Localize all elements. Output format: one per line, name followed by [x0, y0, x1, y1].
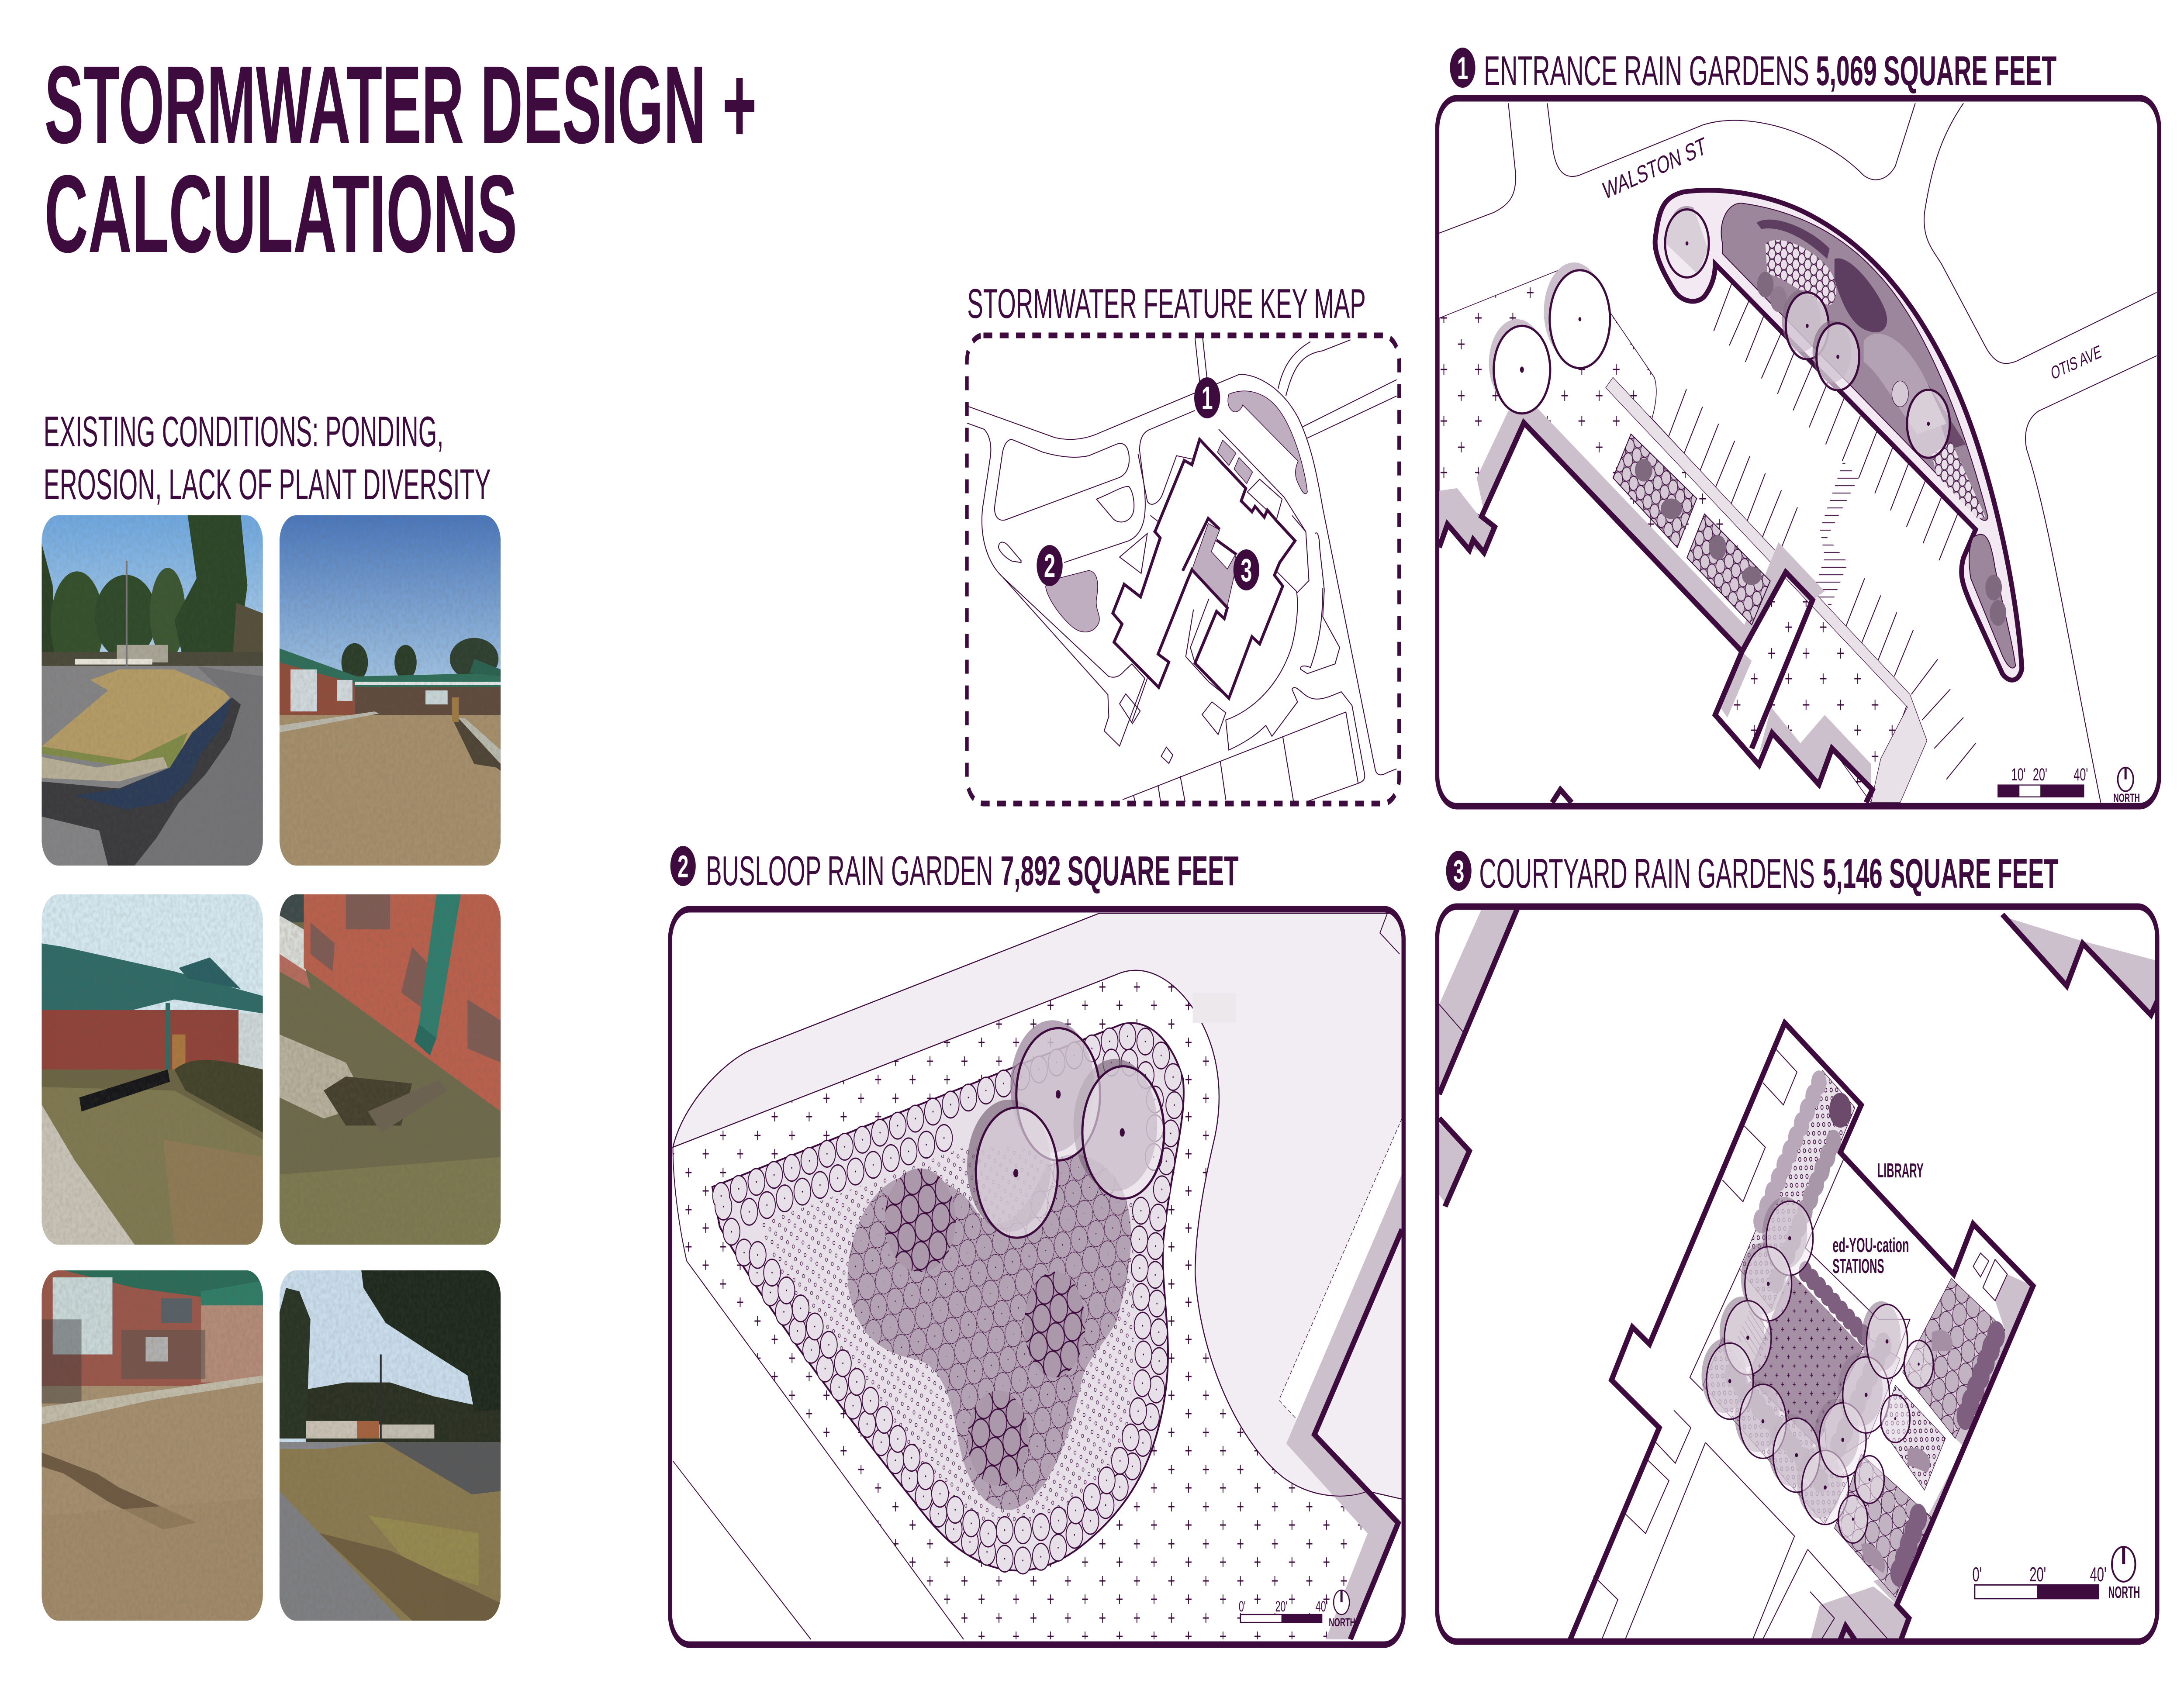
shaded edges	[1439, 909, 2158, 1642]
bed accents	[1861, 1330, 1952, 1573]
street labels and scale text: panel 1: 10'	[2011, 765, 2026, 785]
photo: brick wall downspout erosion	[280, 894, 501, 1245]
site lines	[673, 913, 1400, 1639]
pale drive area	[673, 913, 1402, 1499]
street labels and scale text: panel 1: WALSTON ST	[1601, 132, 1708, 204]
building outline	[1113, 439, 1295, 698]
title: CALCULATIONS	[45, 152, 517, 276]
walkway strip	[1606, 377, 1927, 803]
rain garden areas	[1046, 391, 1307, 632]
marker 2: 2	[1044, 548, 1055, 584]
front rain beds	[1613, 434, 1770, 625]
parking stalls	[1668, 282, 1976, 780]
heading: existing conditions	[44, 408, 491, 509]
marker 2	[1037, 545, 1063, 586]
scale text: panel 2: NORTH	[1329, 1616, 1355, 1629]
dashed frame	[967, 335, 1399, 804]
site linework	[1439, 1004, 2007, 1642]
right bed hedges	[1895, 1335, 1996, 1584]
labels and scale text: panel 3: LIBRARY	[1877, 1159, 1924, 1182]
heading: courtyard rain gardens: 3	[1453, 853, 1464, 889]
building outline	[1439, 909, 2158, 1642]
heading: existing conditions: EROSION, LACK OF PLANT DIVERSITY	[44, 461, 491, 509]
shrub clusters	[885, 1168, 1085, 1486]
labels and scale text: panel 3: 40'	[2090, 1563, 2107, 1586]
heading: courtyard rain gardens: 5,146 SQUARE FEET	[1823, 850, 2059, 897]
heading: entrance rain gardens	[1450, 48, 2056, 95]
inner row	[749, 1061, 1156, 1534]
labels and scale text: panel 3	[1832, 1159, 2140, 1601]
site linework	[967, 338, 1396, 802]
labels and scale text: panel 3: 0'	[1972, 1563, 1982, 1586]
scale bar	[1975, 1585, 2098, 1599]
title: STORMWATER DESIGN +	[45, 42, 757, 166]
building shadow band	[1439, 408, 1871, 790]
heading: entrance rain gardens: 5,069 SQUARE FEET	[1816, 48, 2056, 95]
street labels and scale text: panel 1	[1601, 132, 2140, 804]
scale bar	[1997, 784, 2084, 797]
plaza lawn	[1439, 263, 1910, 803]
scale text: panel 2: 40'	[1316, 1598, 1328, 1615]
scale bar	[1241, 1615, 1322, 1622]
building outline	[1314, 1229, 1402, 1639]
bed blobs	[1635, 459, 1762, 585]
tree trunks	[1728, 1236, 1920, 1521]
heading: busloop rain garden: 2	[677, 849, 688, 884]
scale text: panel 2: 20'	[1275, 1598, 1288, 1615]
street labels and scale text: panel 1: 20'	[2033, 765, 2047, 785]
title	[45, 42, 757, 276]
main rain garden	[1655, 190, 2022, 680]
central basin	[848, 1155, 1131, 1510]
panel: entrance rain gardens plan	[1439, 103, 2157, 803]
marker 1: 1	[1202, 380, 1213, 417]
lawn with plus symbols	[673, 970, 1398, 1639]
street labels and scale text: panel 1: NORTH	[2113, 791, 2140, 804]
north arrow	[2118, 767, 2133, 791]
panel frame: entrance	[1437, 98, 2159, 806]
heading: entrance rain gardens: ENTRANCE RAIN GARDENS	[1484, 48, 1809, 95]
heading: existing conditions: EXISTING CONDITIONS: PONDING,	[44, 408, 444, 456]
streets	[1439, 103, 2157, 803]
heading: courtyard rain gardens	[1446, 850, 2059, 897]
garden trees	[1665, 206, 1950, 458]
courtyard trees	[1707, 1201, 1933, 1543]
panel: busloop rain garden plan	[673, 913, 1402, 1639]
garden inner beds	[1721, 203, 2015, 668]
street labels and scale text: panel 1: 40'	[2073, 765, 2088, 785]
labels and scale text: panel 3: 20'	[2029, 1563, 2046, 1586]
labels and scale text: panel 3: ed-YOU-cation	[1832, 1234, 1909, 1257]
right beds	[1835, 1279, 2005, 1597]
middle shrub row	[1835, 1345, 1883, 1454]
tree canopy shadows	[967, 1020, 1157, 1232]
lawn trees	[1489, 262, 1610, 414]
marker 1	[1194, 377, 1220, 418]
panel: stormwater feature key map	[967, 335, 1399, 804]
parking edge strip	[1279, 1118, 1402, 1421]
crosswalk	[1813, 462, 1859, 607]
upper planting strip	[1739, 1070, 1855, 1309]
heading: entrance rain gardens: 1	[1457, 50, 1468, 86]
lower planting strip	[1703, 1338, 1849, 1524]
marker 3	[1234, 549, 1259, 590]
photo: road edge and parking	[280, 1270, 501, 1621]
north arrow	[1334, 1590, 1349, 1615]
marker 3: 3	[1241, 552, 1252, 589]
trees	[976, 1028, 1164, 1238]
dark scallop hedge	[1805, 1272, 1866, 1338]
panel frame: busloop	[670, 909, 1403, 1645]
scale text: panel 2	[1239, 1598, 1355, 1629]
heading: key map: STORMWATER FEATURE KEY MAP	[967, 280, 1366, 328]
heading: busloop rain garden: 7,892 SQUARE FEET	[1001, 848, 1239, 895]
ring of shrubs	[721, 1036, 1175, 1561]
photo: downspout pipe and lawn	[41, 894, 263, 1245]
lower shrub row	[1732, 1375, 1825, 1486]
photo: building and eroded bare soil	[41, 1270, 263, 1621]
outer row	[721, 1036, 1175, 1561]
heading: courtyard rain gardens: COURTYARD RAIN GARDENS	[1479, 850, 1815, 897]
labels and scale text: panel 3: NORTH	[2108, 1583, 2140, 1601]
building outline	[1439, 423, 1873, 803]
middle planting strip	[1825, 1338, 1900, 1465]
central plaza	[1746, 1272, 1866, 1449]
panel: courtyard rain gardens plan	[1439, 909, 2158, 1642]
small plant dots	[759, 1147, 1133, 1534]
heading: busloop rain garden: BUSLOOP RAIN GARDEN	[706, 848, 993, 895]
labels and scale text: panel 3: STATIONS	[1832, 1255, 1884, 1278]
photo: courtyard bare soil	[280, 515, 501, 866]
heading: busloop rain garden	[670, 846, 1239, 895]
hatched terraces	[1737, 1306, 1866, 1441]
scale text: panel 2: 0'	[1239, 1598, 1246, 1615]
garden body	[712, 1023, 1184, 1570]
tree shadows	[1702, 1197, 1901, 1518]
street labels and scale text: panel 1: OTIS AVE	[2049, 341, 2103, 384]
scalloped shrub rows	[1756, 1083, 1843, 1287]
building shadow band	[1286, 1174, 1402, 1639]
panel frame: courtyard	[1437, 907, 2157, 1642]
north arrow	[2112, 1547, 2135, 1582]
photo: ponding at parking curb	[41, 515, 263, 866]
